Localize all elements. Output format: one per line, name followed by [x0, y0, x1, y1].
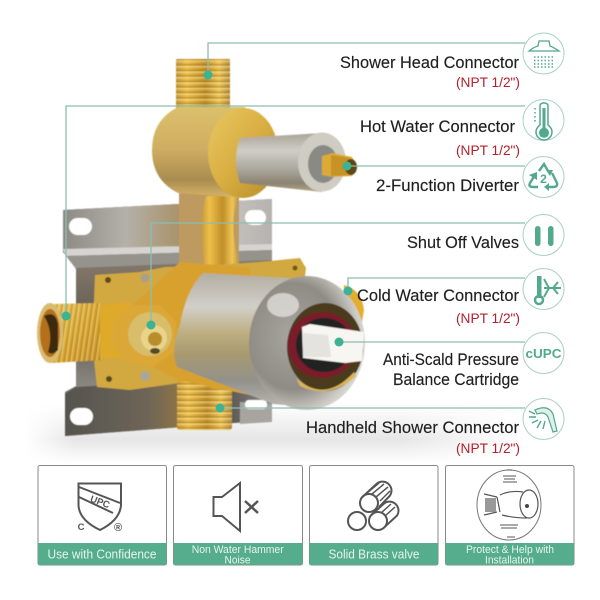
icon: UPC shield: [78, 484, 122, 534]
left threaded pipe: [37, 302, 130, 363]
caption: Non Water Hammer: [192, 544, 284, 556]
label: cold water connector: Cold Water Connector: [357, 286, 519, 305]
main body gold joint: [125, 262, 250, 395]
upper brass body: [152, 107, 245, 198]
callout: diverter line: [342, 162, 525, 170]
stem inner ring: [308, 145, 338, 183]
icon: UPC shield: C: [78, 522, 85, 533]
caption: Solid Brass valve: [328, 548, 420, 562]
icon: cold thermometer: [523, 268, 564, 310]
white cartridge: [302, 324, 364, 363]
brass mounting plate: [94, 258, 306, 390]
front escutcheon cap: [249, 276, 365, 410]
icon: UPC shield: UPC: [88, 494, 111, 511]
callout: hot water connector line: [62, 106, 525, 320]
mounting bracket: [63, 199, 272, 436]
gold inner rim: [296, 372, 356, 391]
icon: recycle 2: [523, 156, 564, 198]
upper flange: [208, 108, 278, 198]
vertical riser: [179, 188, 240, 278]
ground shadow: [25, 405, 525, 463]
icon: cUPC: cUPC: [526, 346, 562, 361]
red seal ring: [288, 312, 356, 378]
icon: installation guard diagram: [477, 470, 541, 540]
label: anti-scald cartridge: Balance Cartridge: [393, 370, 519, 389]
label: shower head NPT: (NPT 1/2"): [456, 74, 520, 90]
label: shower head connector: Shower Head Connector: [340, 53, 519, 72]
cold inlet brass behind cap: [344, 285, 364, 322]
lower threaded connector: [177, 380, 232, 430]
shut off hex valve: [113, 305, 176, 367]
icon: thermometer: [523, 100, 564, 140]
caption: Noise: [224, 554, 250, 566]
main silver cylinder: [174, 273, 320, 408]
callout: shut off valves line: [146, 223, 525, 330]
top threaded connector: [176, 59, 230, 109]
stem end disc: [298, 132, 346, 192]
label: handheld shower connector: Handheld Shower Connector: [306, 418, 519, 437]
label: anti-scald cartridge: Anti-Scald Pressure: [383, 350, 519, 369]
icon: pause bars: [523, 214, 564, 256]
icon: brass rods: [348, 482, 399, 530]
callout: cartridge line: [334, 338, 525, 346]
caption: Installation: [485, 554, 534, 566]
dark interior: [296, 318, 352, 372]
diverter silver stem: [236, 133, 322, 192]
cap opening: [287, 303, 363, 391]
label: hot water NPT: (NPT 1/2"): [456, 142, 520, 158]
panel: solid brass valve: [310, 466, 438, 565]
caption: [192, 544, 284, 566]
caption: Use with Confidence: [48, 548, 157, 562]
valve product illustration: [37, 59, 365, 436]
panel: use with confidence: [38, 466, 166, 565]
icon: shower head: [523, 33, 564, 74]
callout: cold water connector line: [344, 278, 525, 296]
panel: non water hammer noise: [174, 466, 302, 566]
callout: handheld shower connector line: [216, 404, 525, 412]
icon: cUPC: [523, 332, 564, 374]
icon: recycle 2: 2: [540, 172, 547, 186]
cap highlight: [267, 293, 299, 317]
panel: protect and help with installation: [446, 466, 574, 566]
icon: hand shower: [523, 398, 564, 440]
label: shut off valves: Shut Off Valves: [407, 233, 519, 252]
label: anti-scald cartridge: [383, 350, 519, 389]
callout: shower head connector line: [204, 43, 525, 80]
caption: [466, 544, 554, 566]
icon: UPC shield: ®: [114, 522, 122, 534]
label: diverter: 2-Function Diverter: [376, 176, 519, 195]
label: handheld NPT: (NPT 1/2"): [456, 440, 520, 456]
icon: muted speaker: [214, 483, 258, 531]
label: hot water connector: Hot Water Connector: [360, 117, 515, 136]
diverter pin: [322, 153, 357, 177]
label: cold water NPT: (NPT 1/2"): [456, 310, 520, 326]
caption: Protect & Help with: [466, 544, 554, 556]
